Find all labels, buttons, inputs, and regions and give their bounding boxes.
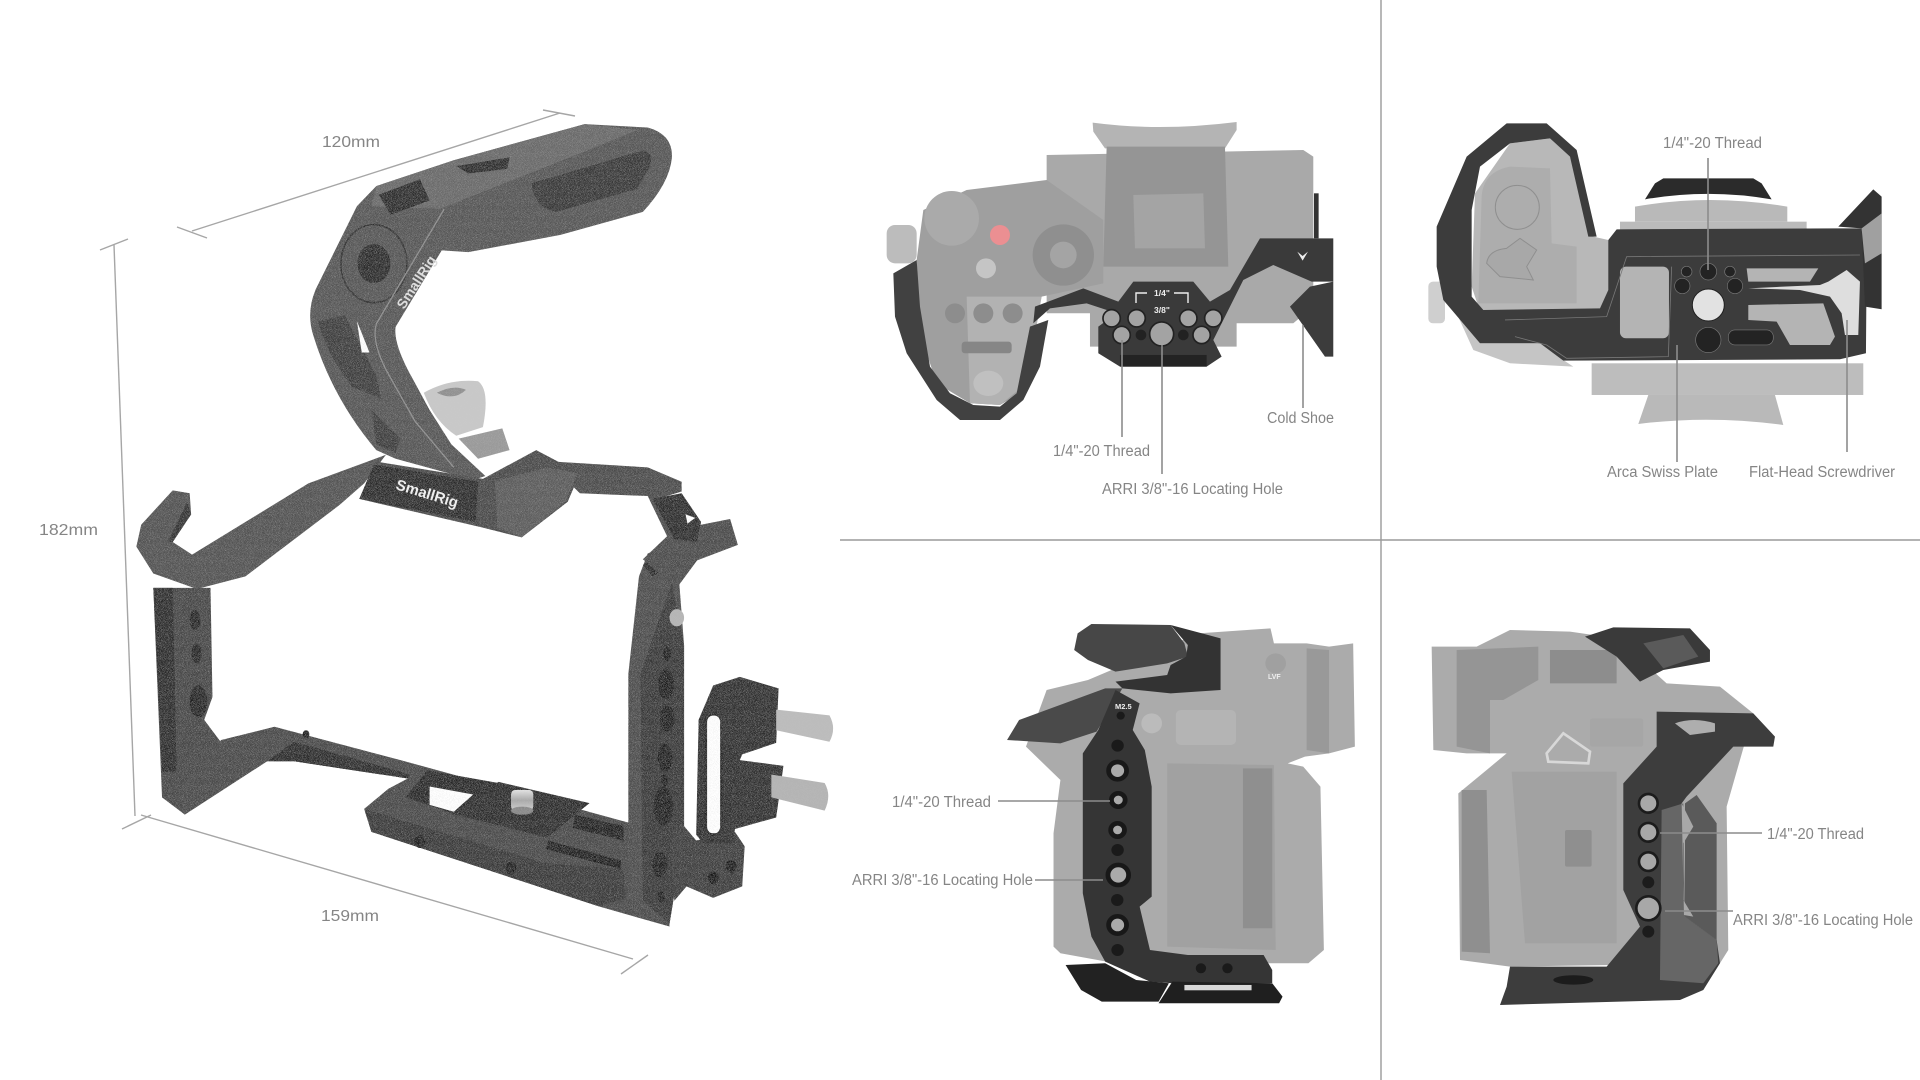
top knob xyxy=(1585,627,1710,682)
leader: locating hole xyxy=(1161,345,1163,474)
cage holes xyxy=(1636,794,1660,920)
label: 159mm: 159mm xyxy=(321,908,379,925)
mount holes xyxy=(1103,310,1222,346)
dimension line: 159mm xyxy=(141,815,648,974)
small holes xyxy=(1136,330,1189,340)
hot shoe xyxy=(1645,178,1772,199)
cage grip xyxy=(893,260,1048,420)
camera side xyxy=(1026,628,1355,963)
marking: 3/8: 3/8" xyxy=(1154,305,1170,315)
camera strip through grip xyxy=(1682,803,1693,917)
panel: top view xyxy=(887,122,1334,498)
small holes xyxy=(1553,876,1654,985)
cage plate xyxy=(1437,123,1867,361)
plate holes xyxy=(1108,762,1129,934)
mount base block xyxy=(359,450,580,537)
label: 1/4"-20 Thread: 1/4"-20 Thread xyxy=(892,794,991,811)
panel: right side view xyxy=(1432,627,1913,1005)
label: 182mm: 182mm xyxy=(39,522,98,539)
cold shoe chevron xyxy=(1297,252,1308,261)
grip lighter area xyxy=(1660,803,1718,983)
slot xyxy=(1184,985,1252,990)
marking: M2.5: M2.5 xyxy=(1115,702,1132,711)
label: Arca Swiss Plate: Arca Swiss Plate xyxy=(1607,464,1718,481)
base strip xyxy=(1120,355,1207,367)
label: ARRI 3/8"-16 Locating Hole: ARRI 3/8"-16 Locating Hole xyxy=(1733,912,1913,929)
screw xyxy=(1692,289,1724,321)
carbon fibre panel xyxy=(1685,795,1717,940)
camera top body xyxy=(887,122,1313,405)
cage right tab xyxy=(1838,189,1882,309)
marking bracket xyxy=(1136,293,1188,303)
dimension line: 120mm xyxy=(177,110,575,238)
cage grip xyxy=(1500,712,1775,1005)
cage illustration xyxy=(136,124,833,927)
strap screw xyxy=(1141,713,1162,733)
panel: bottom view xyxy=(1428,123,1895,481)
cage logo: SmallRig xyxy=(394,477,460,512)
camera at top right xyxy=(1862,213,1882,263)
vertical plate xyxy=(1083,690,1272,983)
camera side xyxy=(1432,630,1753,967)
camera parts xyxy=(1428,138,1863,425)
screwdriver xyxy=(1748,270,1860,335)
top frame right arm with cold shoe xyxy=(536,460,738,588)
marking: 1/4: 1/4" xyxy=(1154,288,1170,298)
plate windows xyxy=(1620,267,1835,345)
plate outlines xyxy=(1505,255,1860,358)
bracket and rods xyxy=(670,677,833,901)
label: 1/4"-20 Thread: 1/4"-20 Thread xyxy=(1663,135,1762,152)
plate holes xyxy=(1675,263,1773,353)
divider lines xyxy=(840,0,1920,1080)
leader: cold shoe xyxy=(1302,325,1304,408)
label: 1/4"-20 Thread: 1/4"-20 Thread xyxy=(1053,443,1150,460)
leader: thread xyxy=(1707,158,1709,270)
panel: main cage with dimensions xyxy=(39,110,833,974)
label: 1/4"-20 Thread: 1/4"-20 Thread xyxy=(1767,826,1864,843)
screw on plate xyxy=(511,790,533,815)
leader: screwdriver xyxy=(1846,320,1848,452)
label: ARRI 3/8"-16 Locating Hole: ARRI 3/8"-16 Locating Hole xyxy=(1102,481,1283,498)
leader: thread xyxy=(1121,340,1123,437)
leader: locating hole xyxy=(1035,879,1103,881)
leader: arca xyxy=(1676,345,1678,462)
cage top block xyxy=(1116,625,1221,693)
bottom plate xyxy=(178,727,670,927)
camera window in top of grip xyxy=(1675,720,1715,735)
small holes xyxy=(1111,712,1233,973)
bottom pad xyxy=(1066,963,1169,1002)
handle and arm xyxy=(310,124,672,480)
cage top bar xyxy=(1033,238,1333,367)
left upright xyxy=(153,588,224,815)
label: ARRI 3/8"-16 Locating Hole: ARRI 3/8"-16 Locating Hole xyxy=(852,872,1033,889)
label: Cold Shoe: Cold Shoe xyxy=(1267,410,1334,427)
right upright xyxy=(628,542,696,924)
leader: thread xyxy=(1660,832,1762,834)
rear arm xyxy=(1007,688,1122,743)
dimension line: 182mm xyxy=(100,239,151,829)
top frame left arm with hook xyxy=(136,455,386,589)
panel: left side view xyxy=(852,624,1355,1003)
cold shoe side xyxy=(1290,282,1333,357)
knob xyxy=(424,381,510,459)
marking: LVF: LVF xyxy=(1268,674,1281,681)
handle logo: SmallRig xyxy=(393,253,439,312)
leader: locating hole xyxy=(1665,910,1733,912)
label: Flat-Head Screwdriver: Flat-Head Screwdriver xyxy=(1749,464,1895,481)
cage rear strip xyxy=(1314,193,1319,238)
bottom plate xyxy=(1159,982,1283,1003)
label: 120mm: 120mm xyxy=(322,134,380,151)
leader: thread xyxy=(998,800,1110,802)
cage top handle knob xyxy=(1074,624,1188,672)
